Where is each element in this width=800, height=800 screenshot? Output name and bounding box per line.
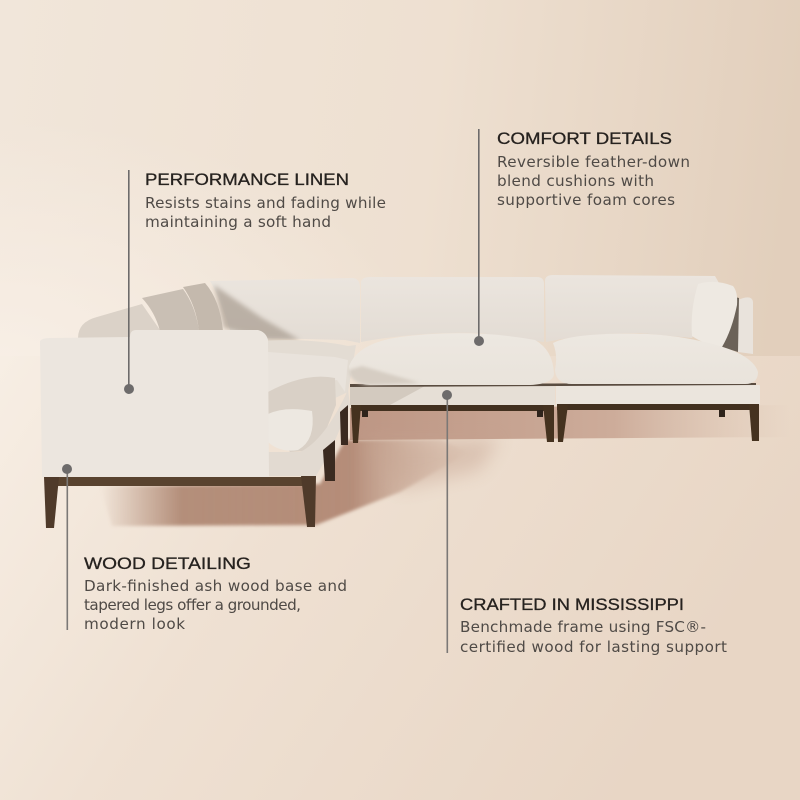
text: crafted in mississippi bbox=[460, 595, 727, 656]
callout: wood detailing marker bbox=[62, 464, 72, 630]
far wing back panel bbox=[210, 278, 360, 343]
left back pillows bbox=[78, 283, 223, 338]
text: crafted in mississippi: Benchmade frame using FSC®- bbox=[460, 618, 706, 636]
left arm bbox=[40, 330, 269, 477]
text: wood detailing: WOOD DETAILING bbox=[84, 554, 251, 573]
callout: performance linen marker bbox=[124, 170, 134, 394]
text: comfort details: Reversible feather-down bbox=[497, 153, 690, 171]
front legs bbox=[351, 404, 759, 443]
text: performance linen: Resists stains and fading while bbox=[145, 194, 386, 212]
middle back cushion bbox=[361, 277, 544, 342]
right back cushion bbox=[545, 275, 719, 342]
text: wood detailing: modern look bbox=[84, 615, 185, 633]
middle base bbox=[350, 386, 555, 406]
front rail bbox=[56, 477, 306, 486]
right seat cushion bbox=[553, 333, 758, 384]
text: comfort details: blend cushions with bbox=[497, 172, 654, 190]
text: performance linen: maintaining a soft hand bbox=[145, 213, 331, 231]
text: wood detailing: Dark-finished ash wood base and bbox=[84, 577, 347, 595]
text: comfort details: COMFORT DETAILS bbox=[497, 129, 672, 148]
text: comfort details bbox=[497, 129, 690, 209]
wing back cushion shadow bbox=[214, 285, 300, 340]
text: performance linen bbox=[145, 170, 386, 231]
text: comfort details: supportive foam cores bbox=[497, 191, 675, 209]
text: crafted in mississippi: CRAFTED IN MISSISSIPPI bbox=[460, 595, 684, 614]
wood rails bbox=[352, 404, 759, 411]
base seam bbox=[350, 383, 756, 387]
sofa bbox=[40, 275, 760, 528]
right end pillow bbox=[692, 282, 737, 347]
floor shadow bbox=[100, 405, 790, 526]
text: wood detailing bbox=[84, 554, 347, 633]
middle seat cushion bbox=[349, 333, 554, 385]
text: wood detailing: tapered legs offer a grounded, bbox=[84, 596, 301, 614]
text: performance linen: PERFORMANCE LINEN bbox=[145, 170, 349, 189]
callout: crafted marker bbox=[442, 390, 452, 653]
front legs bbox=[44, 476, 316, 528]
callout: comfort details marker bbox=[474, 129, 484, 346]
text: crafted in mississippi: certified wood for lasting support bbox=[460, 638, 727, 656]
back legs bbox=[362, 410, 725, 417]
right base bbox=[556, 385, 760, 405]
far wing legs bbox=[323, 405, 348, 481]
left wing seats bbox=[262, 340, 356, 476]
right arm bbox=[738, 297, 753, 354]
callout lines and dots bbox=[62, 129, 484, 653]
